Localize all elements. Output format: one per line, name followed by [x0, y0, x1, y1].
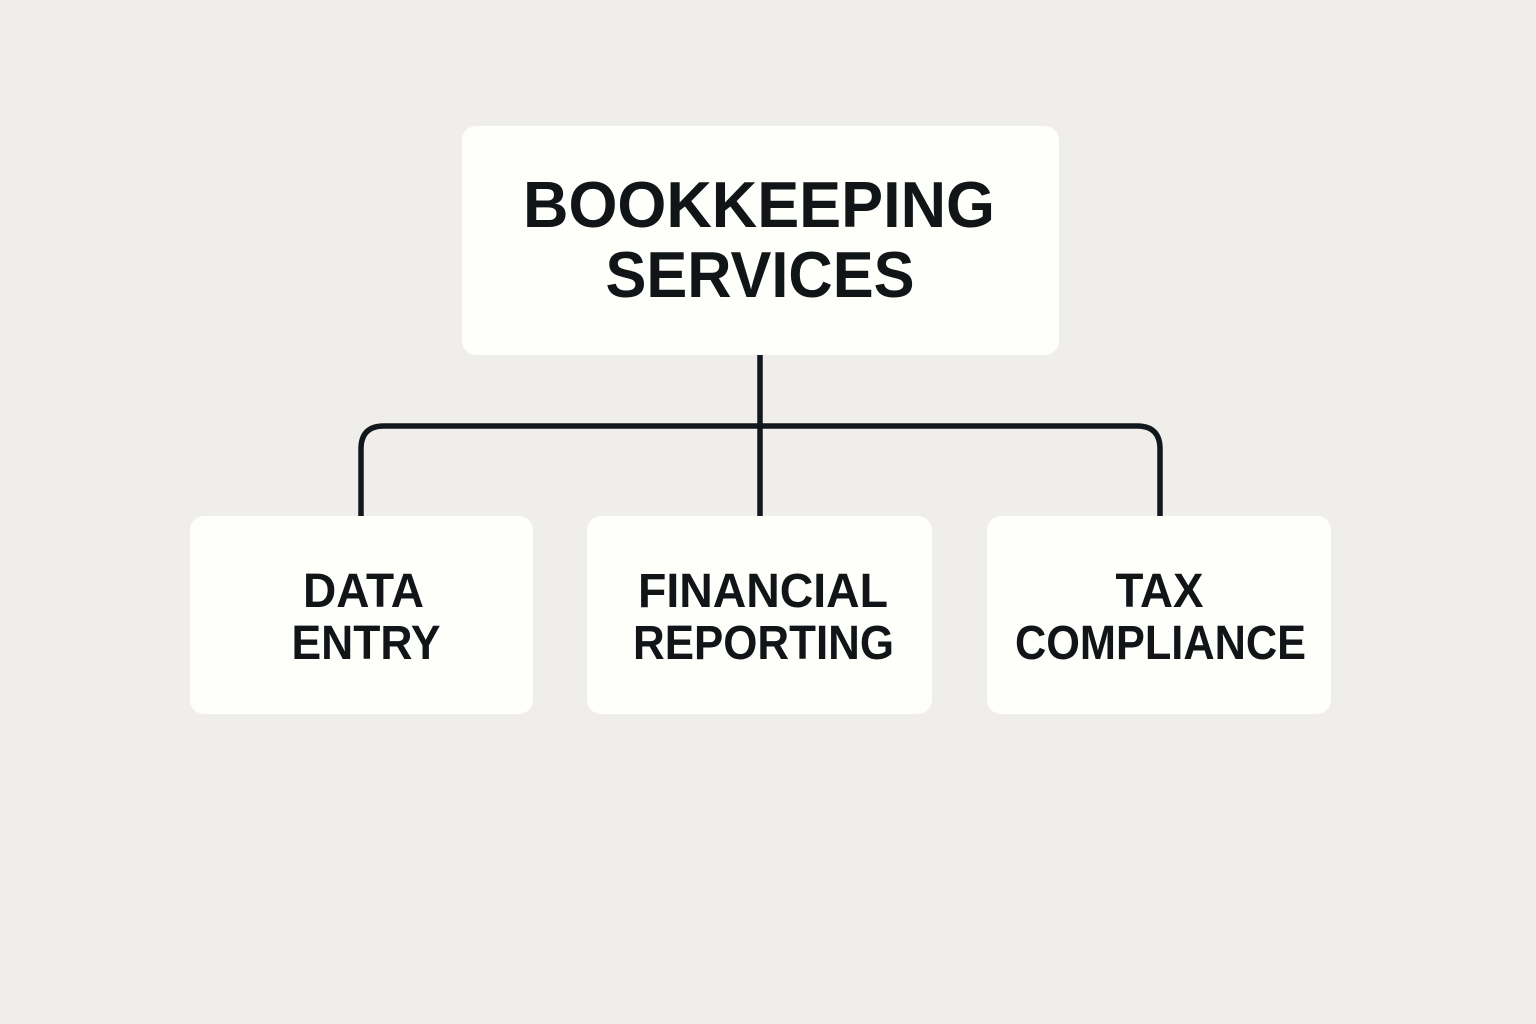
- label: data entry: DATA: [303, 565, 424, 618]
- heading: bookkeeping services: SERVICES: [606, 238, 914, 311]
- panel: bookkeeping services: [462, 126, 1059, 355]
- label: financial reporting: FINANCIAL: [638, 565, 888, 618]
- panel: financial reporting: [587, 516, 932, 714]
- panel: data entry: [190, 516, 533, 714]
- label: tax compliance: [1015, 565, 1306, 670]
- label: financial reporting: REPORTING: [633, 617, 894, 670]
- label: tax compliance: COMPLIANCE: [1015, 617, 1306, 670]
- heading: bookkeeping services: [523, 168, 995, 311]
- label: financial reporting: [633, 565, 894, 670]
- label: data entry: ENTRY: [292, 617, 440, 670]
- panel: tax compliance: [987, 516, 1331, 714]
- label: data entry: [292, 565, 440, 670]
- heading: bookkeeping services: BOOKKEEPING: [523, 168, 995, 241]
- label: tax compliance: TAX: [1116, 565, 1204, 618]
